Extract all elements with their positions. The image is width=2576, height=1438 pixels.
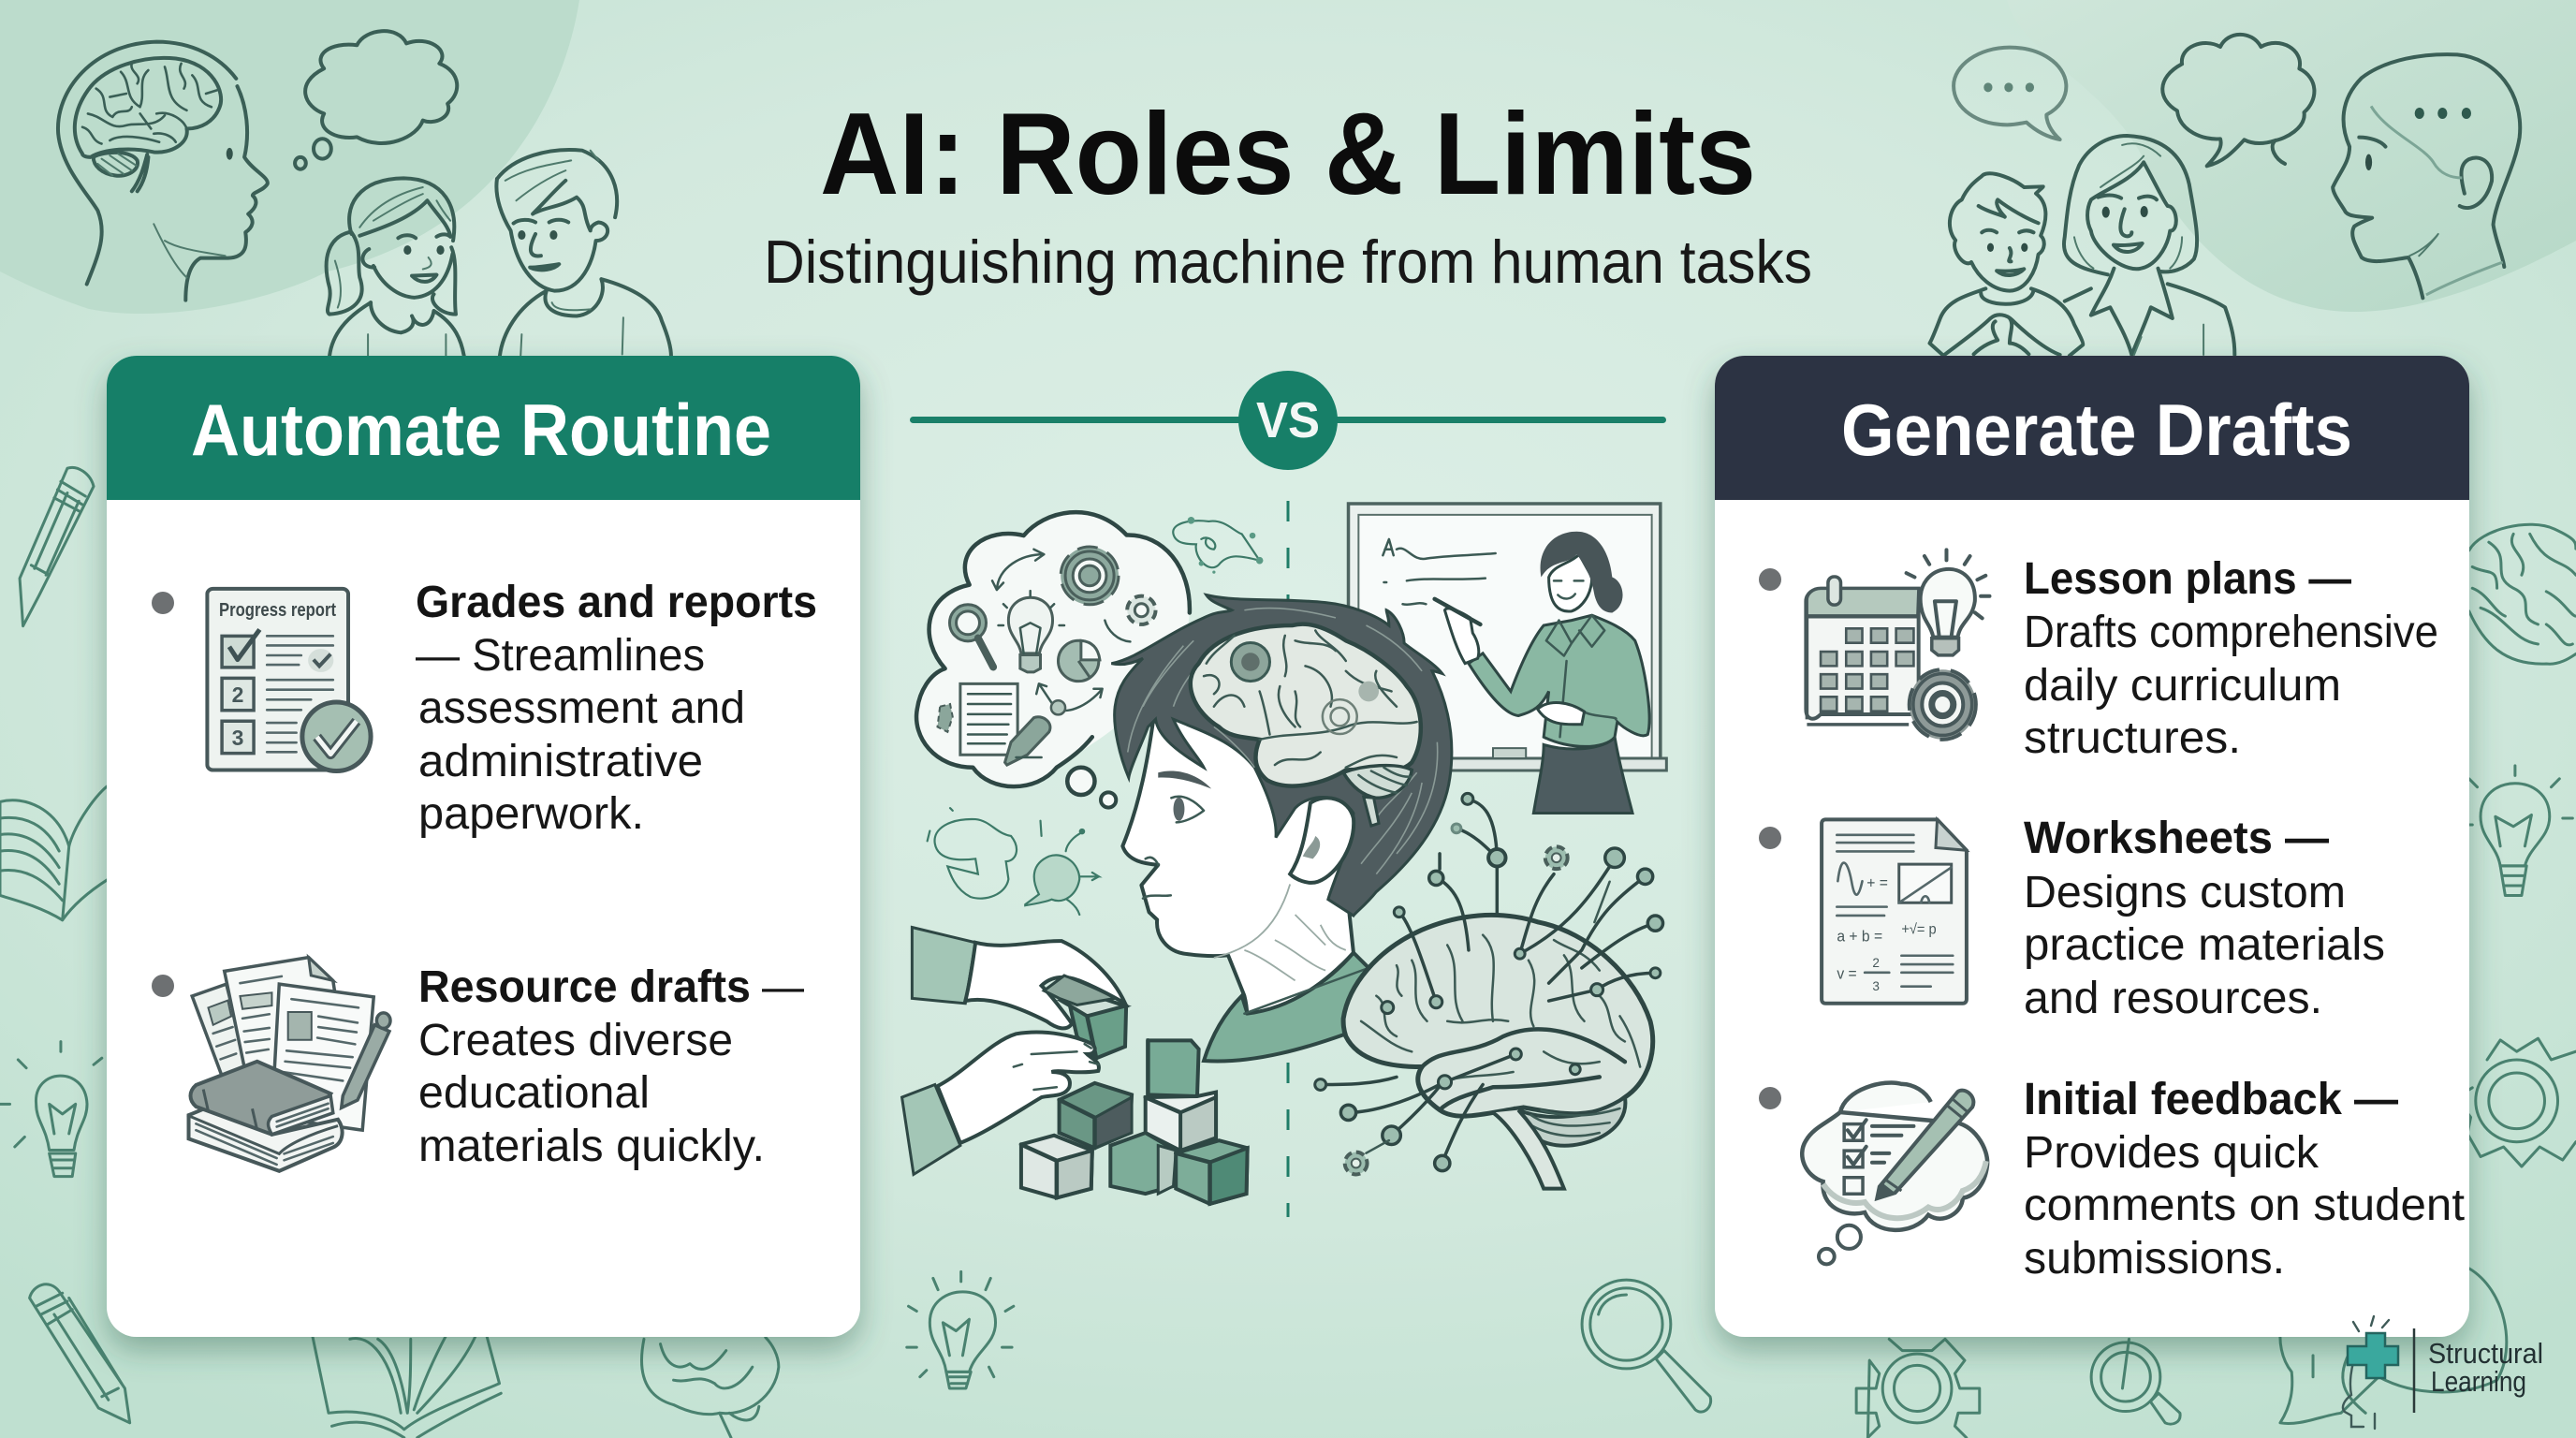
icon: woman [2064,136,2234,355]
heading: Generate Drafts [1841,389,2352,471]
text: initial feedback: Initial feedback — [2024,1075,2398,1124]
background blob: top left [0,0,579,314]
sleeves [912,928,975,1004]
icon: open book left [0,785,109,920]
eye and brow [1143,771,1211,899]
icon: math worksheet: 2 [1872,955,1880,970]
icon: progress report [207,589,371,770]
text: grades and reports: administrative [418,737,703,786]
logo text: Structural [2428,1337,2543,1370]
arrows [992,550,1130,641]
heading: Automate Routine [191,389,771,471]
bullet [1759,568,1781,591]
icon: light bulb bottom [907,1271,1014,1388]
text: lesson plans: structures. [2024,713,2241,763]
brain on head [1191,624,1421,826]
teacher [1435,532,1649,814]
panel: Automate Routine [107,356,860,1337]
text: resource drafts [418,962,804,1171]
icon: brain right [2469,524,2576,664]
text: worksheets: and resources. [2024,974,2322,1023]
hair [1111,595,1452,916]
top right sketches: speech bubble, cloud, boy, woman, head [1930,35,2520,356]
text: worksheets: Worksheets — [2024,814,2329,863]
icon: magnifier bottom [1582,1280,1711,1412]
text: grades and reports: paperwork. [418,789,644,839]
icon: small magnifier bottom [2091,1339,2180,1424]
icon: math worksheet [1822,819,1967,1004]
upper hand [965,941,1125,1028]
logo text: Learning [2431,1365,2526,1398]
text: resource drafts: Resource drafts [418,962,751,1012]
icon: boy with clasped hands [1930,173,2083,356]
icon: pencil bottom left [30,1284,130,1423]
shirt [1204,953,1368,1062]
bullet [1759,1087,1781,1109]
card body [1715,356,2469,1337]
icon: brain bottom [641,1338,779,1438]
top block [1069,998,1126,1058]
icon: girl [327,178,464,356]
icon: progress report: Progress report [219,599,336,621]
icon: gear right [2456,1038,2576,1167]
top left sketches: head, thought cloud, children [58,31,671,356]
card body [107,356,860,1337]
text: initial feedback: Provides quick [2024,1128,2320,1178]
icon: math worksheet: v = [1837,965,1857,983]
document and pen [960,683,1050,765]
icon: light bulb left [0,1042,102,1177]
panel: Generate Drafts [1715,356,2469,1337]
lower hand [937,1033,1099,1143]
icon: calendar, bulb, gear [1806,550,1989,740]
icon: boy [496,150,671,356]
icon: progress report: 2 [232,682,243,707]
icon: pencil left [20,467,94,626]
whiteboard [1349,504,1666,770]
icon: light bulb right [2464,766,2572,895]
neural links [1315,793,1663,1174]
pie chart [1058,640,1100,682]
VS divider: VS [1256,392,1320,448]
blocks [1148,1040,1199,1096]
card header [107,356,860,500]
text: lesson plans: Drafts comprehensive [2024,608,2438,657]
text: grades and reports: assessment and [418,683,745,733]
subtitle: Distinguishing machine from human tasks [764,227,1812,296]
central vertical dashed line [1286,501,1290,1217]
text: resource drafts: educational [418,1068,650,1118]
icon: math worksheet: a + b = [1837,928,1882,945]
icon: feedback thought cloud [1802,1082,1987,1264]
central illustration [902,504,1666,1204]
text: grades and reports [416,578,817,839]
icon: math worksheet: + = [1866,874,1888,891]
text: lesson plans: Lesson plans — [2024,554,2351,604]
small doodle clouds [928,517,1263,915]
card header [1715,356,2469,500]
text: lesson plans: daily curriculum [2024,661,2341,711]
neural brain [1315,793,1663,1189]
text: initial feedback: submissions. [2024,1234,2285,1284]
icon: open book bottom [312,1334,501,1438]
logo: Structural Learning [2343,1316,2543,1429]
icon: papers and books [187,958,390,1171]
icon: speech bubble [1954,48,2066,139]
logo text [2428,1337,2543,1398]
text: lesson plans [2024,554,2438,763]
logo divider [2413,1328,2415,1413]
bullet [152,975,174,997]
icon: talking head [2333,54,2520,298]
gear icons [949,547,1156,667]
text: resource drafts: — [762,962,804,1012]
text: initial feedback: comments on student [2024,1181,2465,1230]
icon: speech bubble and head bottom right [2280,1269,2507,1424]
bullet [1759,827,1781,849]
background doodles [0,467,2576,1438]
text: worksheets: practice materials [2024,920,2385,970]
thought bubble with icons [916,512,1190,808]
icon: speech cloud [2162,35,2314,166]
text: worksheets: Designs custom [2024,868,2346,917]
title: AI: Roles & Limits [820,90,1756,219]
icon: progress report: 3 [232,726,243,750]
text: resource drafts: Creates diverse [418,1016,733,1065]
icon: head with brain [58,42,268,301]
background blob: top right [2007,0,2576,312]
icon: gear bottom [1856,1339,1980,1438]
logo head [2343,1316,2389,1429]
icon: math worksheet: 3 [1872,978,1880,993]
logo cross [2348,1333,2398,1378]
icon: math worksheet: +√= p [1901,921,1937,938]
text: initial feedback [2024,1075,2465,1284]
text: grades and reports: Grades and reports [416,578,817,627]
ear [1290,798,1354,883]
neck and face [1122,686,1376,1014]
bullet [152,592,174,614]
light bulb [999,591,1064,672]
boy profile [1111,595,1452,1062]
hands and blocks [902,928,1248,1204]
text: resource drafts: materials quickly. [418,1122,765,1171]
icon: empty thought cloud [295,31,457,169]
VS divider [910,371,1666,470]
text: grades and reports: — Streamlines [416,631,705,681]
text: worksheets [2024,814,2385,1023]
